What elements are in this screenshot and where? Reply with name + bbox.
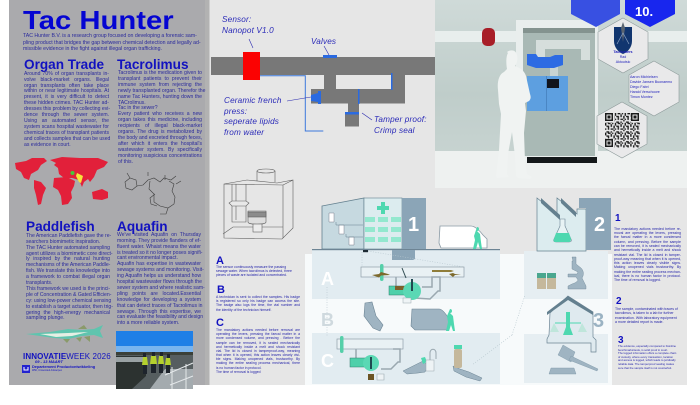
text: 1: moval are operating the levers, pressing <box>614 231 681 235</box>
icon: C vial in hand <box>453 345 482 381</box>
heading: 1: 1 <box>615 213 621 224</box>
text: department: Departement Productontwikkeling <box>32 364 95 369</box>
hexagon: QR code <box>597 102 647 158</box>
logo: Innovatieweek: INNOVATIEWEEK 2026 <box>23 352 111 360</box>
text: tacrolimus: Tacrolimus is the medication given to <box>118 70 202 76</box>
hexagon text: team <box>613 50 633 64</box>
heading: Tacrolimus: Tacrolimus <box>117 57 189 72</box>
text: aquafin: can evaluate the feasibility and design <box>117 314 203 320</box>
ground line <box>312 249 500 250</box>
hexagon text: names: Diego Fabri <box>630 85 649 89</box>
icon: gavel <box>549 345 598 374</box>
label: ceramic french press: from water <box>224 128 264 137</box>
text: paddlefish: The American Paddlefish gave the re- <box>26 233 111 239</box>
text: 2 <box>615 307 678 324</box>
text: 3: The evidence, especially compared to bioinline <box>618 344 676 348</box>
text: tacrolimus: organ takes this medicine, including <box>118 117 202 123</box>
text: paddlefish: ple of Concentration & Gated Efficien- <box>26 292 111 298</box>
text: organ trade: chemical traces of transplant patients <box>24 130 109 136</box>
text: aquafin: sewage. Through this expertise, we <box>117 309 201 315</box>
text: B: is registered so only his badge can access the site. <box>216 299 300 303</box>
label: ceramic french press: seperate lipids <box>224 117 279 126</box>
text: tacrolimus: Every patient who receives a new <box>118 111 202 117</box>
divider strip <box>205 0 210 385</box>
text: organ trade: volve black-market organs. Illegal <box>24 77 109 83</box>
hexagon text: team: Tachunters <box>613 50 633 54</box>
marker: map green region <box>70 171 74 175</box>
icon: B handheld device <box>364 302 383 331</box>
hexagon: team members <box>629 61 679 116</box>
hexagon text: team: Aktoutsic <box>616 60 630 64</box>
text: aquafin: Aquafin has expertise in wastewater <box>117 261 201 267</box>
text: A <box>216 265 292 277</box>
text: organ trade: and collects samples that can be used <box>24 136 110 142</box>
text: tacrolimus: of this. <box>118 159 133 165</box>
marker: map yellow region <box>76 173 83 183</box>
text: intro: pling product that bridges the gap between chemical detection and legally ad- <box>23 40 201 46</box>
icon: QR code <box>604 112 640 148</box>
text: paddlefish <box>26 233 113 321</box>
text: organ trade: within or near legitimate hospitals. At <box>24 88 109 94</box>
text: organ trade: dence through the sewer system. <box>24 112 109 118</box>
scene letter A: A <box>321 269 334 289</box>
hexagon text: 10.: 10. <box>635 4 653 19</box>
label: ceramic french press: Ceramic french <box>224 96 282 105</box>
sewer block <box>392 250 415 260</box>
text: 1: resistant vial. The lid is closed in tamper- <box>614 253 681 257</box>
figure: person in front of cabinet <box>496 50 532 179</box>
band: right lower <box>524 334 608 383</box>
heading: 2: 2 <box>616 296 622 307</box>
text: 1: ical, there is no human factor in protocol. <box>614 274 681 278</box>
text: C: sample can be removed, it is sealed mechanically <box>216 341 300 345</box>
text: aquafin: pling points are located.Essential <box>117 291 201 297</box>
text: 3: sure that the sample itself is not counterfeit. <box>618 366 672 370</box>
text: tacrolimus: TACrolimus. <box>118 100 146 106</box>
text: 1: column, and pressing. Before the sample <box>614 240 681 244</box>
hexagon: blue top left <box>571 0 620 27</box>
text: tacrolimus: after which it enters the hospital's <box>118 141 202 147</box>
text: paddlefish: The TAC Hunter automated sampling <box>26 245 110 251</box>
text: aquafin: sewer system and where realistic sam- <box>117 285 205 291</box>
dotted connections <box>327 251 525 365</box>
scene number 2: 2 <box>594 214 605 236</box>
hexagon: blue number 10 <box>625 0 675 27</box>
band: right upper <box>524 251 608 299</box>
text: 3: of custody, where every transaction, location <box>618 355 673 359</box>
text: aquafin: knowledge for developing a system <box>117 297 201 303</box>
label: tamper proof <box>374 115 427 135</box>
text: aquafin <box>117 232 205 326</box>
text: paddlefish: sampling plunge. <box>26 315 65 321</box>
text: paddlefish: cy: using low-power chemical sensing <box>26 298 111 304</box>
text: paddlefish: transplants. <box>26 280 52 286</box>
icon: sample vials <box>537 273 556 289</box>
text: 1: and hermetically inside a melt and shock <box>614 248 681 252</box>
icon: microscope <box>568 257 586 289</box>
text: C: The mandatory actions needed before removal are <box>216 328 300 332</box>
text: paddlefish: mechanisms of the American Paddle- <box>26 262 110 268</box>
diagram: C pipe and reactor <box>337 336 403 380</box>
panel: central light grey background <box>205 0 687 385</box>
text: B: The badge also logs the time, the vial number and <box>216 303 300 307</box>
text: 3: The logged information offers a complete chain <box>618 351 676 355</box>
icon: factory with flask <box>537 198 611 251</box>
text: 1 <box>614 227 681 282</box>
text: B: A technician is sent to collect the samples. His badge <box>216 295 300 299</box>
text: 3 <box>618 344 676 370</box>
text: tacrolimus: name Tac Hunters, hunting down the <box>118 94 202 100</box>
text: 1: The time of removal is logged. <box>614 278 661 282</box>
diagram: sensor piping <box>211 39 435 131</box>
text: university: WMI, Universiteit Antwerpen <box>32 369 62 372</box>
text: paddlefish: fish. We translate this knowledge into <box>26 268 110 274</box>
text: A: pieces of waste are isolated and concentrated. <box>216 273 287 277</box>
text: intro: missible evidence in the fight against illegal organ trafficking. <box>23 46 162 52</box>
label: tamper proof: Crimp seal <box>374 126 415 135</box>
text: C <box>216 328 300 374</box>
text: aquafin: into a more reliable system. <box>117 320 179 326</box>
icon: white van with technician <box>439 226 487 249</box>
text: paddlefish: agent utilizes a biomimetic core direct- <box>26 251 113 257</box>
text: tacrolimus <box>118 70 206 165</box>
text: organ trade: system scans hospital wastewater for <box>24 124 109 130</box>
text: organ trade: as evidence in court. <box>24 142 71 148</box>
text: paddlefish: gering the high-energy mechanical <box>26 310 110 316</box>
drawing: isometric sensor housing <box>223 169 293 239</box>
text: 3: and access is logged, which leads to juridically <box>618 358 676 362</box>
text: organ trade: Using an automated sensor, the <box>24 118 109 124</box>
text: paddlefish: ly inspired by the natural hunting <box>26 256 110 262</box>
text: C: The time of removal is logged <box>216 370 260 374</box>
label: ceramic french press: press: <box>224 107 247 116</box>
label: tamper proof: Tamper proof: <box>374 115 427 124</box>
text: dates: 09 - 13 MAART <box>35 358 63 364</box>
hexagon text: names: Davide Jansen Buonaemo <box>630 80 672 84</box>
text: 1: making the entire sealing process mechan- <box>614 270 681 274</box>
text: tacrolimus: monitoring suspicious concentrations <box>118 153 202 159</box>
text: aquafin: is treated so it no longer poses signifi- <box>117 250 203 256</box>
heading: 3: 3 <box>618 335 624 346</box>
image: Aquafin site photo <box>116 331 193 389</box>
text: aquafin: sewage systems and monitoring. Visit- <box>117 267 204 273</box>
text: organ trade: dresses this problem by collecting evi- <box>24 106 110 112</box>
panel: left grey background <box>9 0 209 385</box>
text: B: the identity of the technician himself. <box>216 308 271 312</box>
text: C: and hermetically inside a melt and shock resistant <box>216 345 300 349</box>
image: paddlefish <box>26 325 103 343</box>
scene letter C: C <box>321 351 334 371</box>
text: C: is no human factor in protocol. <box>216 366 261 370</box>
text: paddlefish: This framework we used is the princi- <box>26 286 110 292</box>
title: Tac Hunter <box>23 5 174 35</box>
text: paddlefish: searchers biomimetic inspiration. <box>26 239 100 245</box>
text: C: making the entire sealing process mechanical, there <box>216 361 300 365</box>
heading: Aquafin: Aquafin <box>117 218 168 234</box>
text: aquafin: hospital wastewater flows through the <box>117 279 202 285</box>
text: C: vial. The lid is closed in tamperproof-way, meaning <box>216 349 300 353</box>
scene letter B: B <box>321 310 334 330</box>
hexagon text: names <box>630 75 672 99</box>
panel: 3D render of sampling cabinet <box>435 0 687 188</box>
icon: tacrolimus molecule <box>125 172 181 214</box>
label: ceramic french press <box>224 96 282 137</box>
text: 2: tacrolimus, is taken to a lab for further <box>615 311 674 315</box>
text: intro <box>23 33 201 52</box>
text: C: operating the levers, pressing the faecal matter in a <box>216 332 300 336</box>
icon: B grey van with technician <box>411 309 455 331</box>
text: 1: this action leaves clearly visible signs. <box>614 261 681 265</box>
heading: C: C <box>216 317 224 329</box>
icon: courthouse with scales <box>547 296 596 352</box>
text: paddlefish: to establish a target actuator, then trig- <box>26 304 113 310</box>
text: A: sewage water. When tacrolimus is detected, three <box>216 269 292 273</box>
text: 2: a more detailed report is made. <box>615 320 663 324</box>
icon: team shield <box>614 22 632 54</box>
label: sensor <box>222 15 274 35</box>
text: aquafin: ing Aquafin helps us understand how <box>117 273 201 279</box>
heading: Paddlefish: Paddlefish <box>26 218 95 234</box>
text: tacrolimus: the body and excreted through feces, <box>118 135 202 141</box>
heading: Organ Trade: Organ Trade <box>24 57 104 72</box>
diagram: A sewer pipe and reactor <box>361 264 464 303</box>
text: tacrolimus: immune system from rejecting the <box>118 82 202 88</box>
text: B <box>216 295 300 312</box>
text: 3: reliable data. The tamperproof sealing makes <box>618 362 674 366</box>
text: C: that when it is opened, this action leaves clearly visi- <box>216 353 300 357</box>
hexagon text: names: Timon Montez <box>630 95 653 99</box>
text: 1: The mandatory actions needed before re- <box>614 227 681 231</box>
text: organ trade <box>24 71 110 148</box>
heading: B: B <box>217 284 225 296</box>
text: 1: the faecal matter in a more condensed <box>614 235 681 239</box>
scene number 1: 1 <box>408 214 419 236</box>
text: tacrolimus: wastewater system. By specifically <box>118 147 202 153</box>
text: 2: examination. With laboratory equipment <box>615 316 677 320</box>
text: C: ble signs. Making unopened vials, trustworthy. By <box>216 357 300 361</box>
icon: sensor dark box <box>363 250 368 252</box>
text: 1: can be removed, it is sealed mechanically <box>614 244 681 248</box>
text: aquafin: morning. They provide flanders of ef- <box>117 238 201 244</box>
icon: world map <box>15 157 108 205</box>
hexagon text: team: Rad <box>620 55 626 59</box>
heading: A: A <box>216 255 224 267</box>
band: step C <box>312 333 500 384</box>
text: 1: proof-way meaning that when it is opened, <box>614 257 681 261</box>
text: organ trade: organ transplants often take place <box>24 82 109 88</box>
text: tacrolimus: transplant patients to prevent their <box>118 76 202 82</box>
icon: hospital <box>322 198 426 249</box>
text: tacrolimus: Tac in the sewer? <box>118 105 158 111</box>
text: organ trade: present, it is very difficult to detect <box>24 94 109 100</box>
label: sensor: Sensor: <box>222 15 251 24</box>
text: aquafin: fluent water. Whaist means the water <box>117 244 201 250</box>
text: organ trade: these hidden crimes. TAC Hunter ad- <box>24 100 109 106</box>
text: tacrolimus: recipients of illegal black-market <box>118 123 202 129</box>
hexagon: team logo <box>598 18 648 73</box>
logo: university <box>22 365 30 373</box>
panel: white scene background <box>305 254 612 385</box>
text: tacrolimus: newly transplanted organ. Therefor the <box>118 88 205 94</box>
icon: C hand with lock <box>403 349 436 374</box>
label: sensor: Nanopot V1.0 <box>222 26 274 35</box>
text: C: more condensed volume, and pressing . Before the <box>216 336 300 340</box>
band: step A <box>312 250 500 299</box>
text: organ trade: Around 70% of organ transplants in- <box>24 71 109 77</box>
scene number 3: 3 <box>593 310 604 332</box>
text: A: The sensor continuously measure the passing <box>216 265 286 269</box>
hexagon text: names: Aaron Michielsen <box>630 75 658 79</box>
hexagon text: names: Harald Verschoore <box>630 90 660 94</box>
text: aquafin: We've visited Aquafin on Thursday <box>117 232 201 238</box>
text: aquafin: that can detect traces of Tacrolimus in <box>117 303 202 309</box>
text: 2: The sample, contaminated with traces of <box>615 307 678 311</box>
text: tacrolimus: organs. The drug is metabolized by <box>118 129 202 135</box>
text: 3: benchmarks/tests, is solid proof in court. <box>618 348 668 352</box>
text: 1: Making unopened vials trustworthy. By <box>614 265 681 269</box>
text: paddlefish: a framework to combat illegal organ <box>26 274 110 280</box>
text: aquafin: cant environmental impact. <box>117 255 178 261</box>
text: intro: TAC Hunter B.V. is a research group focused on developing a forensic sam- <box>23 33 197 39</box>
label: valves: Valves <box>311 37 336 46</box>
